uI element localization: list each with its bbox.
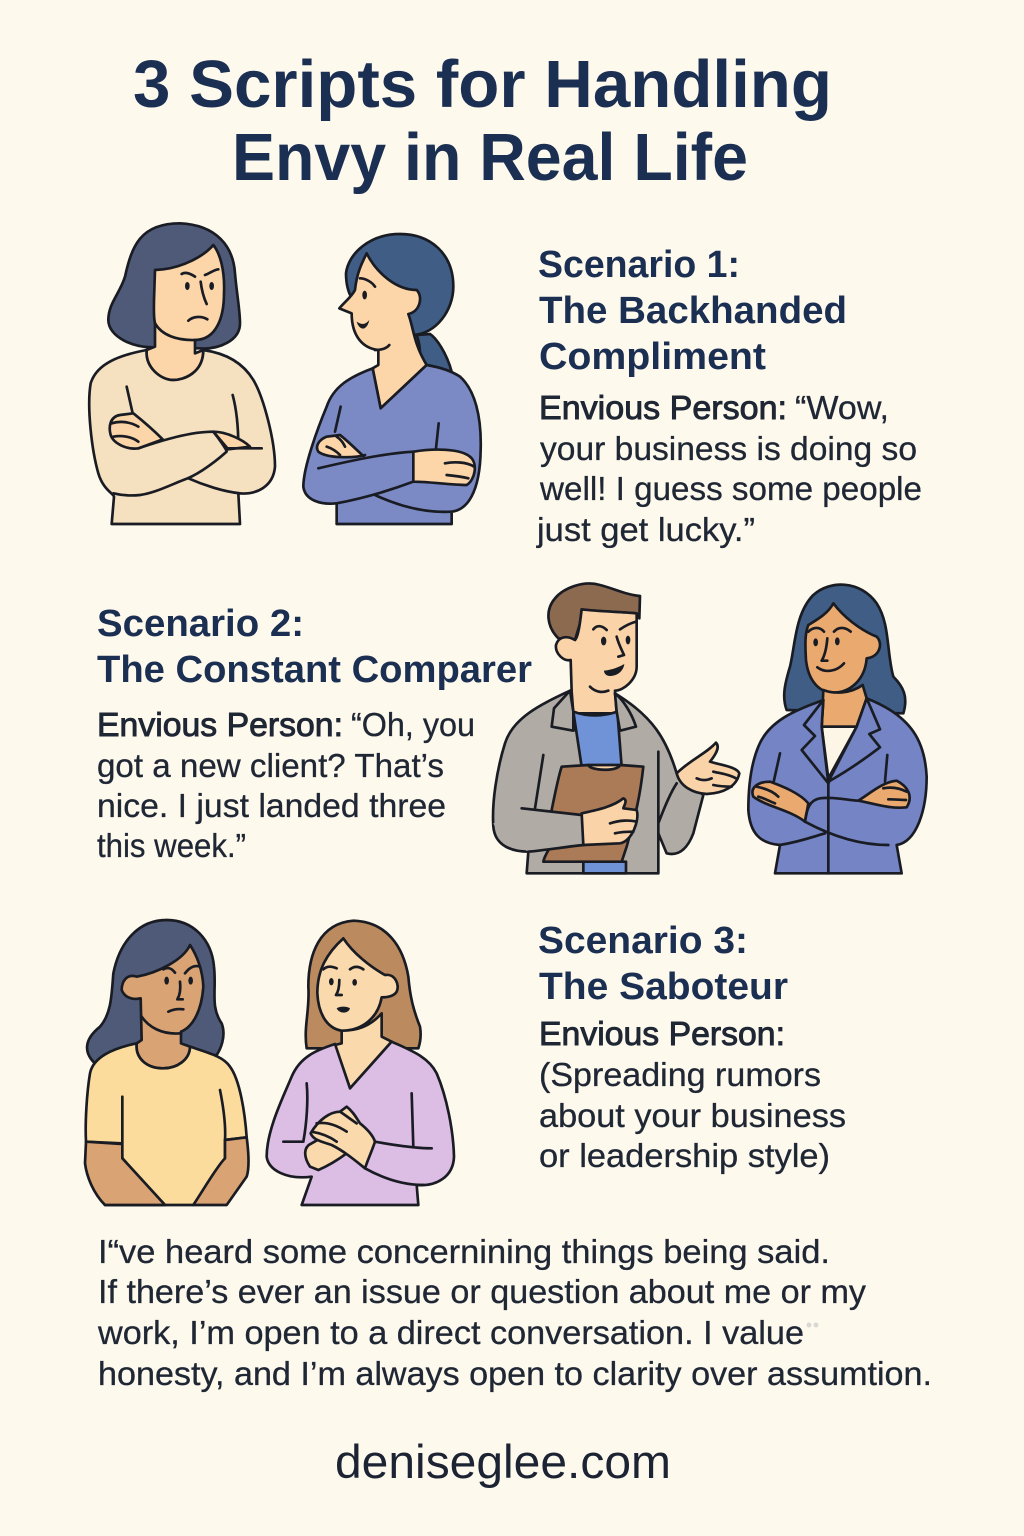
- figure: smiling woman in blue top: [303, 234, 481, 524]
- title: 3 Scripts for Handling: [133, 47, 832, 122]
- website footer: deniseglee.com: [335, 1435, 671, 1488]
- illustration: man with clipboard and woman in blazer: [493, 584, 927, 873]
- figure: worried woman in lilac top: [267, 921, 454, 1205]
- heading: scenario 3: [538, 920, 788, 1008]
- text block: scenario 2 quote: Envious Person:: [97, 706, 343, 743]
- text block: response script: work, I’m open to a direct conversation. I value: [97, 1314, 804, 1351]
- text block: scenario 3 description: or leadership style): [539, 1137, 830, 1174]
- heading: scenario 1: Compliment: [539, 336, 766, 378]
- text block: scenario 3 description: [539, 1015, 846, 1174]
- text block: scenario 3 description: (Spreading rumors: [539, 1056, 821, 1093]
- heading: scenario 3: The Saboteur: [539, 966, 788, 1008]
- text block: scenario 2 quote: “Oh, you: [351, 706, 475, 743]
- text block: scenario 2 quote: got a new client? That’s: [97, 747, 444, 784]
- heading: scenario 2: [97, 603, 532, 691]
- illustration: two women facing each other: [85, 920, 454, 1205]
- heading: scenario 2: Scenario 2:: [97, 603, 304, 645]
- heading: scenario 2: The Constant Comparer: [97, 649, 532, 691]
- heading: scenario 1: [538, 244, 847, 378]
- text block: response script: honesty, and I’m always open to clarity over assumtion.: [98, 1355, 932, 1392]
- figure: man with clipboard: [493, 584, 739, 873]
- text block: scenario 1 quote: “Wow,: [795, 389, 889, 426]
- text block: response script: If there’s ever an issue or question about me or my: [98, 1273, 867, 1310]
- text block: scenario 1 quote: Envious Person:: [539, 389, 787, 426]
- text block: scenario 2 quote: this week.”: [97, 827, 246, 864]
- text block: response script: I“ve heard some concernining things being said.: [98, 1233, 830, 1270]
- title: [133, 47, 832, 195]
- panel: scenario 3: [85, 920, 846, 1205]
- text block: scenario 3 description: Envious Person:: [539, 1015, 785, 1052]
- figure: annoyed woman in beige sweater: [89, 223, 275, 524]
- text block: scenario 1 quote: well! I guess some people: [539, 470, 922, 507]
- illustration: two women with crossed arms: [89, 223, 481, 524]
- figure: frowning woman in yellow tee: [85, 920, 249, 1205]
- text block: response script: [97, 1233, 932, 1392]
- title: Envy in Real Life: [232, 120, 748, 195]
- text block: scenario 1 quote: [536, 389, 922, 548]
- heading: scenario 1: Scenario 1:: [538, 244, 740, 286]
- text block: scenario 2 quote: nice. I just landed three: [97, 787, 446, 824]
- text block: scenario 1 quote: your business is doing so: [540, 430, 917, 467]
- figure: woman in blue blazer: [748, 585, 927, 873]
- heading: scenario 3: Scenario 3:: [538, 920, 748, 962]
- text block: scenario 2 quote: [97, 706, 475, 864]
- heading: scenario 1: The Backhanded: [539, 290, 847, 332]
- panel: scenario 2: [97, 584, 927, 873]
- text block: scenario 3 description: about your business: [539, 1097, 846, 1134]
- panel: scenario 1: [89, 223, 922, 548]
- text block: scenario 1 quote: just get lucky.”: [536, 511, 755, 548]
